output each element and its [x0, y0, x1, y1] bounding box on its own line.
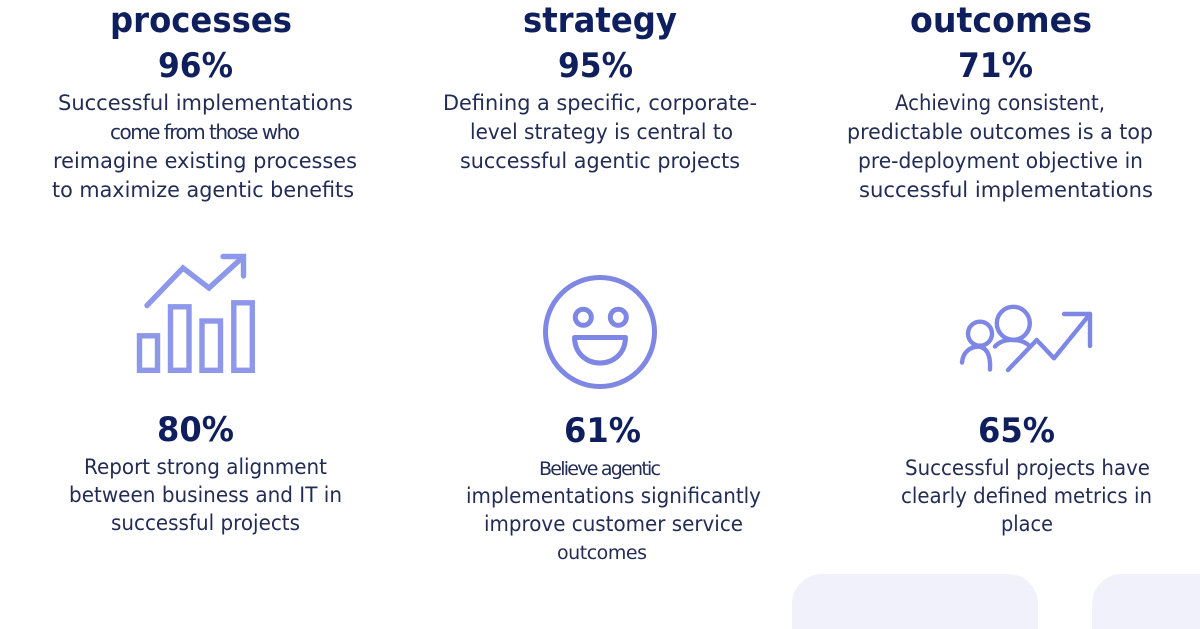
stat: 71%: 71% — [958, 46, 1033, 86]
stat: 80%: 80% — [157, 410, 234, 450]
icon: people with rising arrow — [962, 307, 1090, 370]
panel: predictable outcomes — [847, 1, 1153, 202]
heading: processes: processes — [110, 1, 292, 41]
text: customer service description — [466, 458, 761, 564]
panel: corporate strategy — [443, 1, 757, 173]
text: strategy description — [443, 91, 757, 173]
text: strategy description: level strategy is central to — [470, 120, 733, 144]
text: processes description: to maximize agentic benefits — [52, 178, 354, 202]
stat: 61%: 61% — [564, 411, 641, 451]
text: alignment description — [69, 455, 342, 535]
text: processes description: reimagine existing processes — [53, 149, 357, 173]
card: bottom right — [1092, 574, 1200, 629]
text: outcomes description: Achieving consistent, — [895, 91, 1105, 115]
text: customer service description: Believe agentic — [539, 458, 661, 480]
text: outcomes description: pre-deployment objective in — [858, 149, 1143, 173]
text: customer service description: outcomes — [557, 542, 647, 564]
text: strategy description: Defining a specific, corporate- — [443, 91, 757, 115]
text: alignment description: Report strong alignment — [84, 455, 327, 479]
text: alignment description: between business and IT in — [69, 483, 342, 507]
text: processes description: Successful implementations — [58, 91, 353, 115]
panel: customer service outcomes — [466, 278, 761, 564]
icon: smiling face — [546, 278, 654, 386]
panel: rethink processes — [52, 1, 357, 202]
text: outcomes description: successful implementations — [859, 178, 1153, 202]
stat: 95%: 95% — [558, 46, 633, 86]
heading: strategy: strategy — [523, 1, 677, 41]
card: bottom centre-right — [792, 574, 1038, 629]
text: customer service description: improve customer service — [484, 512, 743, 536]
text: outcomes description — [847, 91, 1153, 202]
panel: business and IT alignment — [69, 256, 342, 535]
text: customer service description: implementations significantly — [466, 484, 761, 508]
stat: 96%: 96% — [158, 46, 233, 86]
text: strategy description: successful agentic projects — [460, 149, 740, 173]
stat: 65%: 65% — [978, 411, 1055, 451]
text: outcomes description: predictable outcomes is a top — [847, 120, 1153, 144]
text: metrics description: clearly defined metrics in — [901, 484, 1152, 508]
text: alignment description: successful projects — [111, 511, 300, 535]
text: processes description: come from those who — [110, 120, 300, 144]
text: metrics description — [901, 456, 1152, 536]
panel: defined metrics — [901, 307, 1152, 536]
text: metrics description: place — [1001, 512, 1053, 536]
text: metrics description: Successful projects have — [905, 456, 1150, 480]
heading: outcomes: outcomes — [910, 1, 1092, 41]
text: processes description — [52, 91, 357, 202]
icon: bar chart with rising arrow — [140, 256, 252, 370]
